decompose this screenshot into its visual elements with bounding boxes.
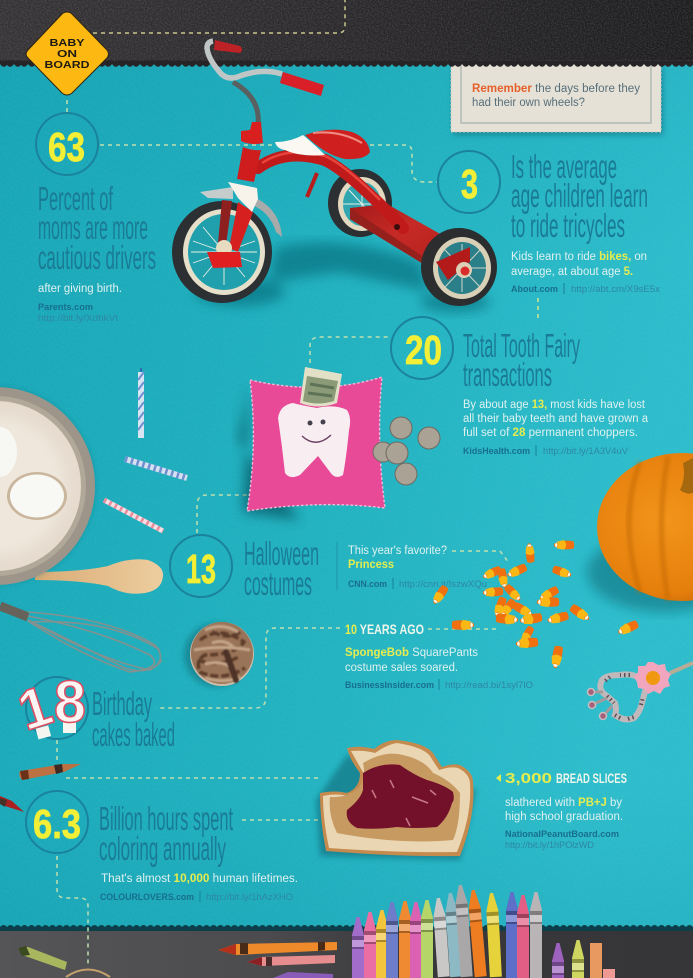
stat: 6.3 billion hours: coloring annually: [99, 830, 226, 867]
illustration: chocolate cupcake: [184, 622, 254, 687]
text: 10 years ago: costume sales soared.: [345, 662, 458, 674]
text: 3000 bread slices: high school graduation.: [505, 811, 623, 823]
stat: 6.3 billion hours: That's almost 10,000 human lifetimes.: [101, 873, 298, 885]
seat: [305, 130, 370, 159]
bread crust: [320, 740, 473, 856]
illustration: upright crayon row: [352, 885, 615, 978]
illustration: pumpkin: [587, 453, 693, 612]
text: 3000 bread slices: slathered with PB+J by: [505, 797, 622, 809]
tricycle shadow: [195, 242, 490, 312]
illustration: tooth fairy pillow: [238, 367, 385, 520]
stat: 6.3 billion hours: http://bit.ly/1hAzXHO: [206, 892, 293, 903]
stat: 63 percent of moms: after giving birth.: [38, 283, 122, 295]
stat: 13 halloween costumes: CNN.com: [348, 579, 387, 590]
stat: 13 halloween costumes: 13: [186, 546, 216, 592]
illustration: candy corn scatter: [430, 540, 640, 669]
stat: 63 percent of moms: http://bit.ly/XdhkVt: [38, 313, 118, 324]
illustration: birthday candles: [104, 368, 187, 531]
decorative dial at bottom: [66, 970, 110, 977]
bread crumb: [323, 743, 470, 852]
stat: 13 halloween costumes: Halloween: [244, 535, 319, 572]
dashed connector lines: [57, 0, 538, 966]
stat: 18 birthday cakes: Birthday: [92, 685, 152, 722]
rear right wheel: [421, 228, 497, 306]
icon: baby on board sign: ON: [57, 48, 77, 60]
head tube: [241, 122, 263, 144]
stat: 3 average age: 3: [461, 161, 478, 207]
text: 10 years ago: [345, 621, 533, 691]
icon: number 8 candle: 8: [54, 669, 86, 735]
step platform: [350, 204, 442, 265]
stat: 20 tooth fairy: [391, 317, 649, 457]
callout: remember note: Remember the days before they: [472, 83, 640, 95]
text: 10 years ago: SpongeBob SquarePants: [345, 647, 478, 659]
stat: 3 average age: About.com: [511, 284, 558, 295]
stat: 3 average age: average, at about age 5.: [511, 266, 633, 278]
stat: 18 birthday cakes: [10, 669, 175, 753]
stat: 63 percent of moms: [36, 113, 156, 324]
stat: 63 percent of moms: Percent of: [38, 180, 113, 217]
stat: 63 percent of moms: cautious drivers: [38, 239, 156, 276]
illustration: lying crayons: [18, 942, 337, 978]
stat: 20 tooth fairy: http://bit.ly/1A3V4uV: [543, 446, 629, 457]
stat: 13 halloween costumes: [170, 535, 487, 602]
icon: number 1 candle: 1: [10, 673, 59, 742]
text: 10 years ago: 10 YEARS AGO: [345, 621, 424, 637]
stat: 6.3 billion hours: 6.3: [33, 801, 81, 847]
illustration: coins: [373, 417, 440, 485]
stat: 13 halloween costumes: http://cnn.it/IszwXQu: [399, 579, 487, 590]
icon: baby on board sign: BOARD: [44, 59, 90, 71]
stat: 63 percent of moms: 63: [48, 124, 85, 170]
stat: 3 average age: Kids learn to ride bikes, on: [511, 251, 647, 263]
illustration: brown crayon: [19, 764, 81, 780]
illustration: flower necklace: [588, 662, 693, 720]
illustration: wooden spoon: [35, 559, 163, 594]
illustration: red crayon: [0, 796, 24, 812]
bottom dark band: [0, 922, 693, 978]
front wheel: [172, 182, 282, 303]
stat: 6.3 billion hours: [26, 791, 298, 903]
illustration: red tricycle: [172, 40, 497, 312]
stat: 13 halloween costumes: This year's favorite?: [348, 545, 447, 557]
illustration: flour bowl with eggs: [0, 387, 95, 585]
text: 3000 bread slices: http://bit.ly/1hPOlzWD: [505, 840, 594, 851]
top dark felt band: [0, 0, 693, 69]
illustration: whisk: [0, 606, 162, 672]
peanut butter: [330, 754, 460, 841]
frame: [258, 156, 403, 228]
text: 10 years ago: BusinessInsider.com: [345, 680, 434, 691]
illustration: PB and J toast: [316, 740, 476, 860]
handlebars: [233, 82, 258, 125]
callout: remember note: had their own wheels?: [472, 97, 585, 109]
jam: [347, 764, 454, 829]
text: 10 years ago: http://read.bi/1syl7lO: [445, 680, 533, 691]
stat: 63 percent of moms: Parents.com: [38, 302, 93, 313]
stat: 63 percent of moms: moms are more: [38, 209, 148, 246]
stat: 13 halloween costumes: costumes: [244, 565, 312, 602]
text: 3000 bread slices: NationalPeanutBoard.com: [505, 829, 619, 840]
stat: 20 tooth fairy: transactions: [463, 356, 552, 393]
stat: 20 tooth fairy: full set of 28 permanent choppers.: [463, 427, 638, 439]
icon: baby on board sign: [26, 12, 108, 95]
text: 3000 bread slices: BREAD SLICES: [556, 770, 627, 786]
text: 3000 bread slices: [496, 770, 627, 851]
stat: 3 average age: http://abt.cm/X9sE5x: [571, 284, 660, 295]
stat: 20 tooth fairy: By about age 13, most kids have lost: [463, 399, 646, 411]
text: 3000 bread slices: 3,000: [505, 770, 552, 787]
stat: 20 tooth fairy: all their baby teeth and have grown a: [463, 413, 649, 425]
icon: baby on board sign: BABY: [50, 37, 84, 49]
rear left wheel: [328, 169, 392, 237]
stat: 13 halloween costumes: Princess: [348, 559, 394, 571]
stat: 20 tooth fairy: KidsHealth.com: [463, 446, 530, 457]
stat: 3 average age: [438, 148, 660, 295]
stat: 6.3 billion hours: COLOURLOVERS.com: [100, 892, 194, 903]
stat: 6.3 billion hours: Billion hours spent: [99, 800, 233, 837]
stat: 20 tooth fairy: 20: [405, 327, 442, 373]
callout: remember note: [451, 58, 663, 135]
text: cakes baked: [92, 716, 175, 753]
